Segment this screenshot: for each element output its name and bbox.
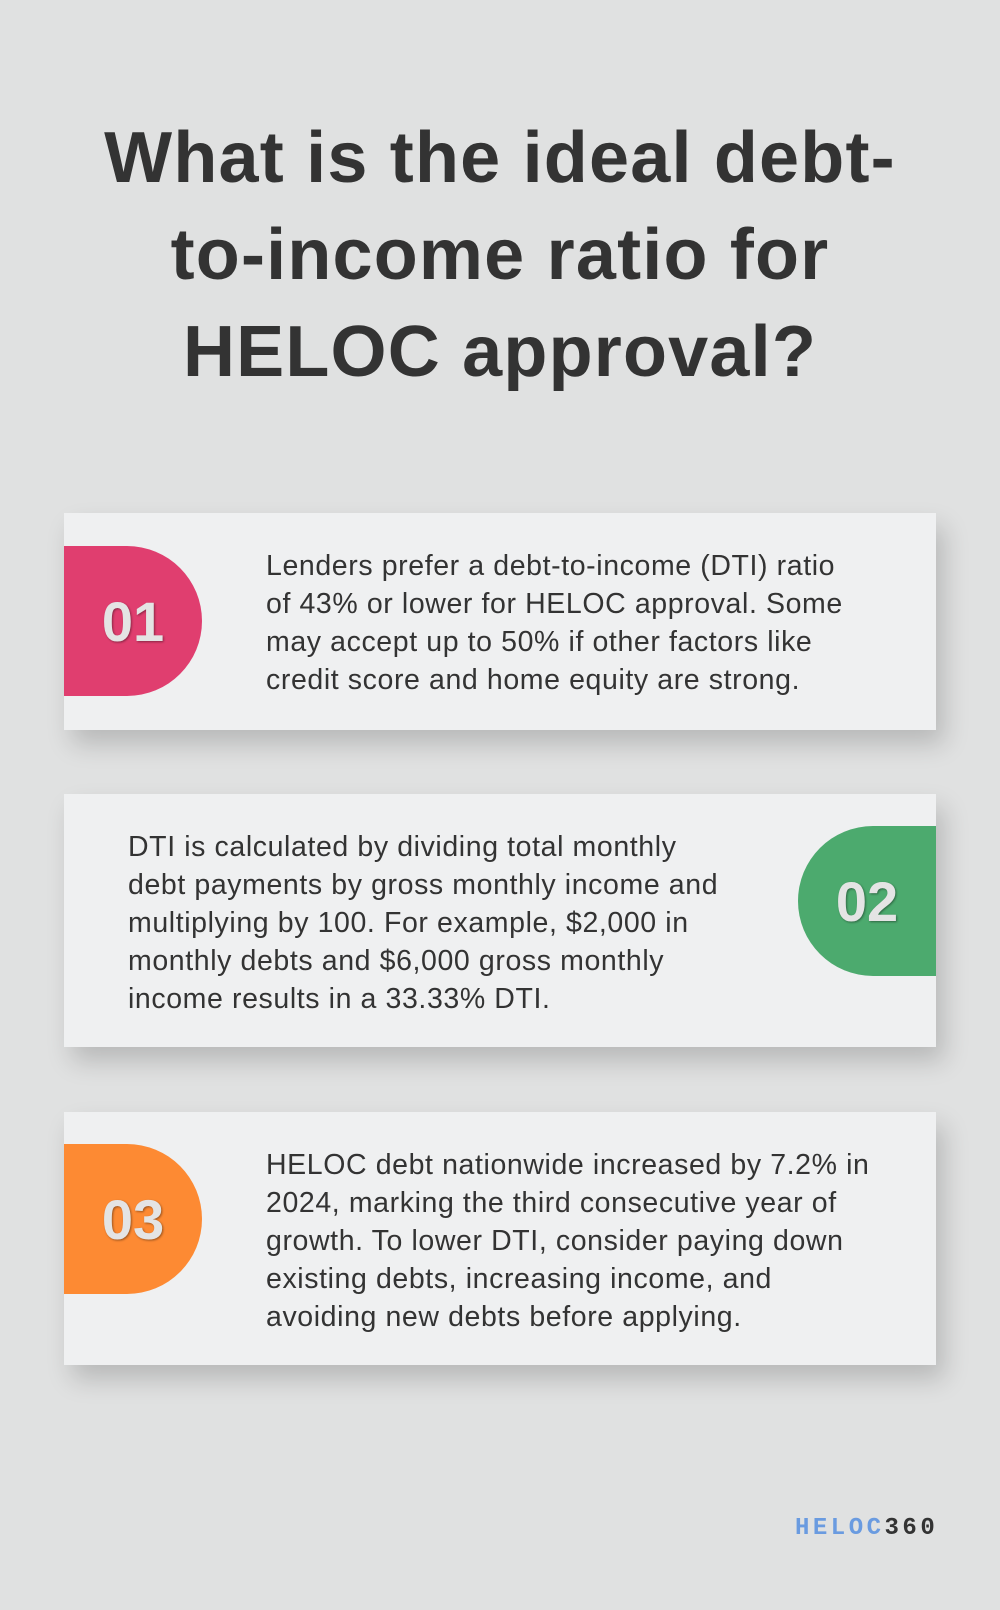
panel: card 1 [64, 513, 936, 730]
text 1: of 43% or lower for HELOC approval. Some [266, 588, 843, 620]
text 1 [266, 550, 843, 696]
text 3: HELOC debt nationwide increased by 7.2% in [266, 1149, 869, 1181]
text 2 [128, 831, 718, 1015]
text 3: avoiding new debts before applying. [266, 1301, 742, 1333]
badge 01 [64, 546, 202, 696]
text 1: Lenders prefer a debt-to-income (DTI) ratio [266, 550, 835, 582]
text 2: income results in a 33.33% DTI. [128, 983, 551, 1015]
text 2: multiplying by 100. For example, $2,000 in [128, 907, 689, 939]
text 3 [266, 1149, 869, 1333]
panel: card 2 [64, 794, 936, 1047]
text 2: DTI is calculated by dividing total monthly [128, 831, 677, 863]
badge 02: 02 [836, 870, 898, 932]
text 3: growth. To lower DTI, consider paying down [266, 1225, 844, 1257]
title: HELOC approval? [183, 312, 817, 392]
title: to-income ratio for [171, 215, 829, 295]
text 2: debt payments by gross monthly income and [128, 869, 718, 901]
panel: card 3 [64, 1112, 936, 1365]
logo: HELOC360 [795, 1515, 938, 1542]
text 3: 2024, marking the third consecutive year of [266, 1187, 837, 1219]
text 1: credit score and home equity are strong. [266, 664, 800, 696]
badge 02 [798, 826, 936, 976]
text 3: existing debts, increasing income, and [266, 1263, 772, 1295]
badge 01: 01 [102, 590, 164, 652]
title: What is the ideal debt- [104, 118, 896, 198]
text 1: may accept up to 50% if other factors like [266, 626, 812, 658]
badge 03: 03 [102, 1188, 164, 1250]
title [104, 118, 896, 392]
text 2: monthly debts and $6,000 gross monthly [128, 945, 664, 977]
badge 03 [64, 1144, 202, 1294]
